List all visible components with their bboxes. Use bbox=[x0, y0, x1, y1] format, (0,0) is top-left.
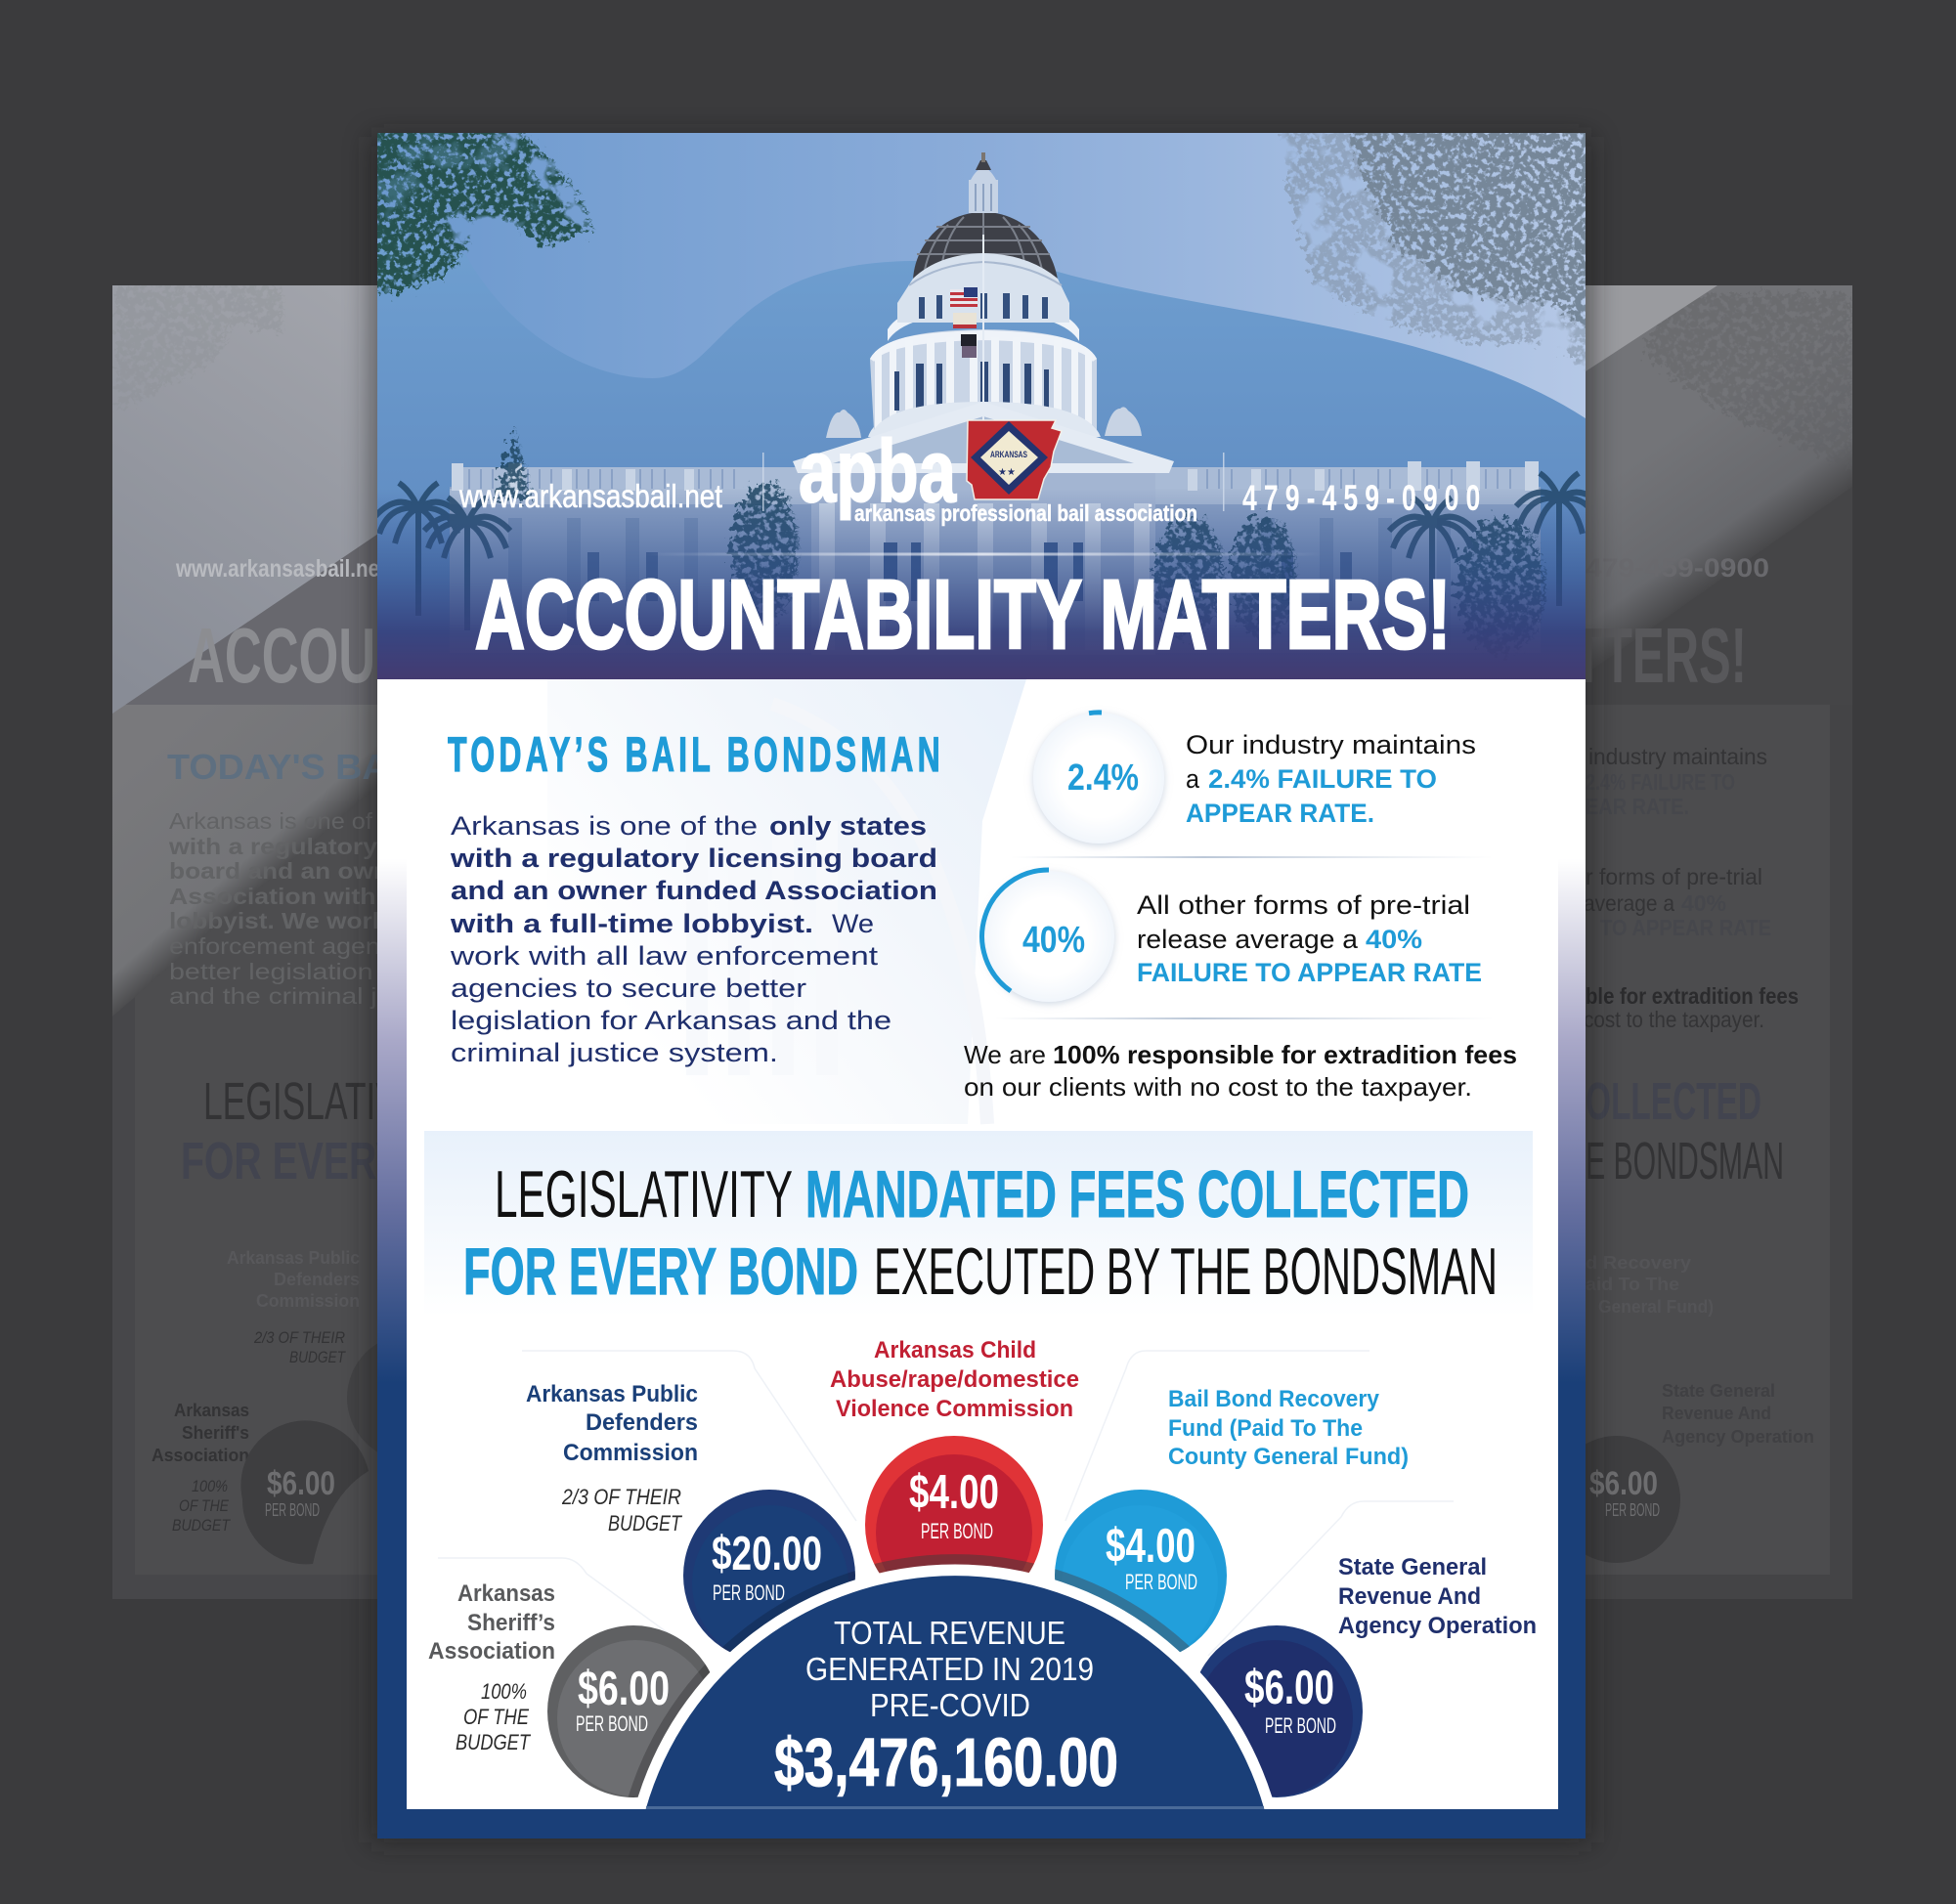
text block: about the association bbox=[450, 811, 937, 1067]
upper drum bbox=[897, 253, 1069, 323]
panel: left background page mockup: Association bbox=[152, 1446, 249, 1465]
heading: today's bail bondsman: TODAY’S BAIL BONDSMAN bbox=[448, 727, 940, 782]
panel: right background page mockup: State General bbox=[1662, 1381, 1775, 1401]
icon: tree top right bbox=[1280, 127, 1593, 373]
panel: right background page mockup: EAR RATE. bbox=[1586, 794, 1689, 819]
text block: about the association: with a full-time lobbyist. bbox=[450, 909, 813, 938]
label: arkansas sheriff's association bbox=[428, 1580, 555, 1665]
label: bail bond recovery fund bbox=[1168, 1386, 1409, 1470]
panel: left background page mockup: www.arkansasbail.net bbox=[175, 555, 387, 583]
label: bail bond recovery fund: Fund (Paid To The bbox=[1168, 1415, 1363, 1442]
note: two thirds of their budget: 2/3 OF THEIR bbox=[561, 1485, 681, 1509]
label: arkansas public defenders commission: Arkansas Public bbox=[526, 1381, 698, 1407]
text block: about the association: with a regulatory licensing board bbox=[450, 844, 937, 873]
text block: about the association: work with all law enforcement bbox=[450, 941, 879, 971]
panel: right background page mockup: d Recovery bbox=[1586, 1253, 1691, 1273]
note: 100 percent of the budget: OF THE bbox=[463, 1705, 529, 1729]
panel: white content area bbox=[407, 679, 1558, 1809]
panel: left background page mockup: Arkansas is one of the bbox=[169, 808, 413, 834]
text block: 2.4 percent failure rate: 2.4% FAILURE TO bbox=[1208, 764, 1437, 794]
panel: left background page mockup: Defenders bbox=[274, 1270, 360, 1289]
header divider lines bbox=[644, 453, 1323, 555]
panel: right background page mockup: TTERS! bbox=[1574, 612, 1747, 699]
panel: left background page mockup: FOR EVERY bbox=[181, 1132, 401, 1190]
panel: left background page mockup: Commission bbox=[256, 1291, 360, 1311]
text block: about the association: only states bbox=[769, 811, 927, 841]
note: two thirds of their budget bbox=[561, 1485, 682, 1536]
text block: 40 percent failure rate: FAILURE TO APPEAR RATE bbox=[1137, 958, 1482, 987]
amount: blue bubble: $4.00 bbox=[1106, 1520, 1195, 1573]
text block: 2.4 percent failure rate: APPEAR RATE. bbox=[1186, 799, 1374, 828]
panel: right background page mockup: Revenue And bbox=[1662, 1404, 1771, 1423]
amount: blue bubble bbox=[1106, 1520, 1197, 1594]
panel: right background page mockup: 479-459-0900 bbox=[1586, 553, 1769, 583]
label: arkansas child abuse commission: Abuse/rape/domestice bbox=[830, 1366, 1079, 1393]
amount: blue bubble: PER BOND bbox=[1125, 1570, 1197, 1594]
label: state general revenue: State General bbox=[1338, 1554, 1487, 1580]
fee bubble: public defenders twenty dollars bbox=[683, 1490, 855, 1652]
dome base bbox=[868, 401, 1101, 437]
icon: arkansas state flag: ARKANSAS bbox=[990, 450, 1027, 459]
amount: red bubble bbox=[909, 1466, 999, 1543]
panel: left background page mockup: enforcement agencie bbox=[169, 933, 413, 959]
text block: 2.4 percent failure rate: Our industry maintains bbox=[1186, 730, 1476, 759]
amount: navy bubble: $20.00 bbox=[712, 1528, 822, 1580]
fee bubble: sheriff's association six dollars bbox=[547, 1625, 710, 1797]
amount: navy bubble bbox=[712, 1528, 822, 1605]
website url: www.arkansasbail.net bbox=[458, 478, 722, 514]
icon: arkansas state flag bbox=[967, 420, 1062, 499]
trees in front of the capitol bbox=[377, 426, 1586, 631]
stat: 40 percent ring: 40% bbox=[1022, 920, 1085, 961]
panel: right background page mockup: 2.4% FAILURE TO bbox=[1586, 769, 1735, 795]
balcony bbox=[888, 319, 1079, 341]
text: total revenue generated: TOTAL REVENUE bbox=[834, 1615, 1065, 1651]
text: total revenue generated: GENERATED IN 2019 bbox=[805, 1651, 1094, 1687]
panel: left background page mockup: better legislation for bbox=[169, 959, 413, 984]
panel: left background page mockup: Sheriff's bbox=[182, 1423, 249, 1443]
panel: right background page mockup: industry maintains bbox=[1588, 744, 1767, 769]
panel: left background page mockup: 100% bbox=[192, 1477, 228, 1495]
text block: about the association: We bbox=[832, 909, 874, 938]
text block: extradition fees bbox=[964, 1040, 1517, 1102]
panel: left background page mockup: $6.00 bbox=[267, 1465, 335, 1502]
heading: legislatively mandated fees: LEGISLATIVITY bbox=[495, 1157, 793, 1232]
amount: red bubble: $4.00 bbox=[909, 1466, 999, 1519]
panel: left background page mockup: ACCOUN bbox=[188, 612, 413, 699]
panel: left background page mockup: Arkansas Public bbox=[227, 1248, 360, 1268]
text block: 2.4 percent failure rate: a bbox=[1186, 764, 1200, 794]
amount: dark navy bubble: $6.00 bbox=[1244, 1662, 1334, 1714]
icon: tree top left bbox=[371, 127, 593, 293]
panel: right background page mockup: OLLECTED bbox=[1586, 1072, 1761, 1131]
text block: 40 percent failure rate: release average a bbox=[1137, 925, 1359, 954]
amount: navy bubble: PER BOND bbox=[713, 1580, 785, 1605]
panel: right background page mockup: Agency Operation bbox=[1662, 1427, 1814, 1447]
fee bubble: bail bond recovery four dollars bbox=[1055, 1490, 1227, 1652]
panel: right background page mockup: TO APPEAR RATE bbox=[1600, 915, 1771, 940]
panel: left background page mockup: TODAY'S BAIL bbox=[167, 747, 421, 787]
panel: right background page mockup: cost to the taxpayer. bbox=[1584, 1007, 1764, 1032]
fee bubble: child abuse commission four dollars bbox=[865, 1436, 1043, 1574]
amount: gray bubble: PER BOND bbox=[576, 1711, 648, 1736]
text block: extradition fees: We are bbox=[964, 1040, 1046, 1069]
logo: apba arkansas professional bail association: apba bbox=[799, 423, 957, 521]
panel: right background page mockup: 40% bbox=[1681, 890, 1726, 916]
text block: about the association: agencies to secure better bbox=[451, 974, 806, 1003]
panel: right background page mockup: ble for extradition fees bbox=[1586, 983, 1799, 1009]
label: arkansas child abuse commission bbox=[830, 1337, 1079, 1422]
heading: legislatively mandated fees: EXECUTED BY THE BONDSMAN bbox=[874, 1234, 1498, 1309]
faint capitol watermark bbox=[547, 679, 1026, 1124]
lantern bbox=[969, 180, 998, 213]
panel: left background page mockup: board and an owner bbox=[169, 858, 413, 884]
phone number: 479-459-0900 bbox=[1242, 478, 1480, 518]
amount: gray bubble bbox=[576, 1663, 670, 1736]
logo: apba arkansas professional bail association: arkansas professional bail association bbox=[854, 500, 1197, 526]
decorative sky wave bbox=[377, 261, 1586, 630]
label: bail bond recovery fund: Bail Bond Recovery bbox=[1168, 1386, 1380, 1412]
text block: extradition fees: 100% responsible for extradition fees bbox=[1053, 1040, 1517, 1069]
panel: left background page mockup: LEGISLATIV bbox=[203, 1072, 399, 1131]
stat: 2.4 percent ring: 2.4% bbox=[1067, 757, 1139, 799]
note: two thirds of their budget: BUDGET bbox=[608, 1511, 682, 1536]
panel: left background page mockup: BUDGET bbox=[289, 1348, 346, 1366]
panel: left background page mockup: with a regulatory lic bbox=[168, 834, 413, 859]
text block: 40 percent failure rate: 40% bbox=[1366, 925, 1422, 954]
logo: apba arkansas professional bail association bbox=[799, 420, 1197, 526]
heading: legislatively mandated fees bbox=[463, 1157, 1498, 1309]
icon: arkansas state flag: ★★ bbox=[998, 467, 1016, 478]
text block: about the association: Arkansas is one of the bbox=[451, 811, 758, 841]
amount: dark navy bubble bbox=[1244, 1662, 1336, 1738]
main flyer frame bbox=[377, 133, 1586, 1839]
text block: about the association: criminal justice system. bbox=[451, 1038, 778, 1067]
panel: left background page mockup: PER BOND bbox=[265, 1500, 320, 1520]
header: capitol photo banner bbox=[371, 127, 1602, 680]
panel: total revenue dome bbox=[646, 1576, 1264, 1809]
fee bubble: state general revenue six dollars bbox=[1191, 1625, 1363, 1797]
label: arkansas child abuse commission: Violence Commission bbox=[836, 1396, 1073, 1422]
text: total revenue generated bbox=[805, 1615, 1094, 1723]
note: 100 percent of the budget: 100% bbox=[481, 1679, 527, 1704]
icon: flags bbox=[950, 287, 978, 358]
title: ACCOUNTABILITY MATTERS! bbox=[475, 560, 1451, 670]
panel: left background page mockup: Association with a f bbox=[169, 884, 413, 909]
panel: left background page mockup bbox=[112, 285, 377, 1599]
amount: red bubble: PER BOND bbox=[921, 1519, 993, 1543]
panel: left background page mockup: BUDGET bbox=[172, 1516, 231, 1535]
panel: right background page mockup: $6.00 bbox=[1589, 1465, 1658, 1502]
amount: dark navy bubble: PER BOND bbox=[1265, 1713, 1336, 1738]
panel: right background page mockup: r forms of pre-trial bbox=[1586, 864, 1762, 889]
label: arkansas child abuse commission: Arkansas Child bbox=[874, 1337, 1036, 1363]
label: state general revenue: Revenue And bbox=[1338, 1583, 1481, 1610]
label: bail bond recovery fund: County General Fund) bbox=[1168, 1444, 1409, 1470]
panel: right background page mockup bbox=[1586, 285, 1852, 1599]
label: arkansas sheriff's association: Sheriff’s bbox=[467, 1610, 555, 1636]
label: arkansas sheriff's association: Association bbox=[428, 1638, 555, 1665]
heading: legislatively mandated fees: FOR EVERY BOND bbox=[463, 1234, 858, 1309]
panel: left background page mockup: OF THE bbox=[179, 1496, 230, 1515]
panel: right background page mockup: PER BOND bbox=[1605, 1500, 1660, 1520]
text block: about the association: and an owner funded Association bbox=[451, 876, 937, 905]
number: total revenue amount: $3,476,160.00 bbox=[774, 1724, 1118, 1800]
panel: right background page mockup: average a bbox=[1584, 890, 1674, 916]
amount: gray bubble: $6.00 bbox=[578, 1663, 670, 1715]
text block: 2.4 percent failure rate bbox=[1186, 730, 1476, 828]
stat: 40 percent ring bbox=[982, 870, 1114, 1002]
colonnade tier bbox=[870, 329, 1097, 430]
text block: 40 percent failure rate bbox=[1137, 890, 1482, 987]
panel: left background page mockup: and the criminal just bbox=[169, 983, 414, 1009]
text block: about the association: legislation for Arkansas and the bbox=[451, 1006, 891, 1035]
panel: left background page mockup: 2/3 OF THEIR bbox=[253, 1328, 345, 1347]
label: arkansas public defenders commission: Defenders bbox=[586, 1409, 698, 1436]
text block: extradition fees: on our clients with no cost to the taxpayer. bbox=[964, 1072, 1472, 1102]
panel: right background page mockup: aid To The bbox=[1586, 1275, 1679, 1294]
dark dome bbox=[913, 212, 1058, 280]
panel: left background page mockup: Arkansas bbox=[174, 1401, 249, 1420]
label: arkansas public defenders commission bbox=[526, 1381, 698, 1466]
panel: left background page mockup: lobbyist. We work w bbox=[169, 908, 413, 933]
heading: legislatively mandated fees: MANDATED FEES COLLECTED bbox=[805, 1157, 1469, 1232]
stat: 2.4 percent ring bbox=[1033, 713, 1164, 844]
label: arkansas public defenders commission: Commission bbox=[563, 1440, 698, 1466]
note: 100 percent of the budget: BUDGET bbox=[456, 1730, 531, 1754]
text: total revenue generated: PRE-COVID bbox=[870, 1687, 1030, 1723]
icon: capitol building bbox=[450, 152, 1541, 655]
text block: 40 percent failure rate: All other forms of pre-trial bbox=[1137, 890, 1470, 920]
panel: right background page mockup: E BONDSMAN bbox=[1586, 1132, 1784, 1190]
panel: legislative fees heading background bbox=[424, 1131, 1533, 1317]
pediment bbox=[793, 437, 1174, 473]
note: 100 percent of the budget bbox=[456, 1679, 531, 1754]
panel: right background page mockup: General Fund) bbox=[1598, 1297, 1714, 1317]
label: state general revenue: Agency Operation bbox=[1338, 1613, 1537, 1639]
label: arkansas sheriff's association: Arkansas bbox=[457, 1580, 555, 1607]
label: state general revenue bbox=[1338, 1554, 1537, 1639]
